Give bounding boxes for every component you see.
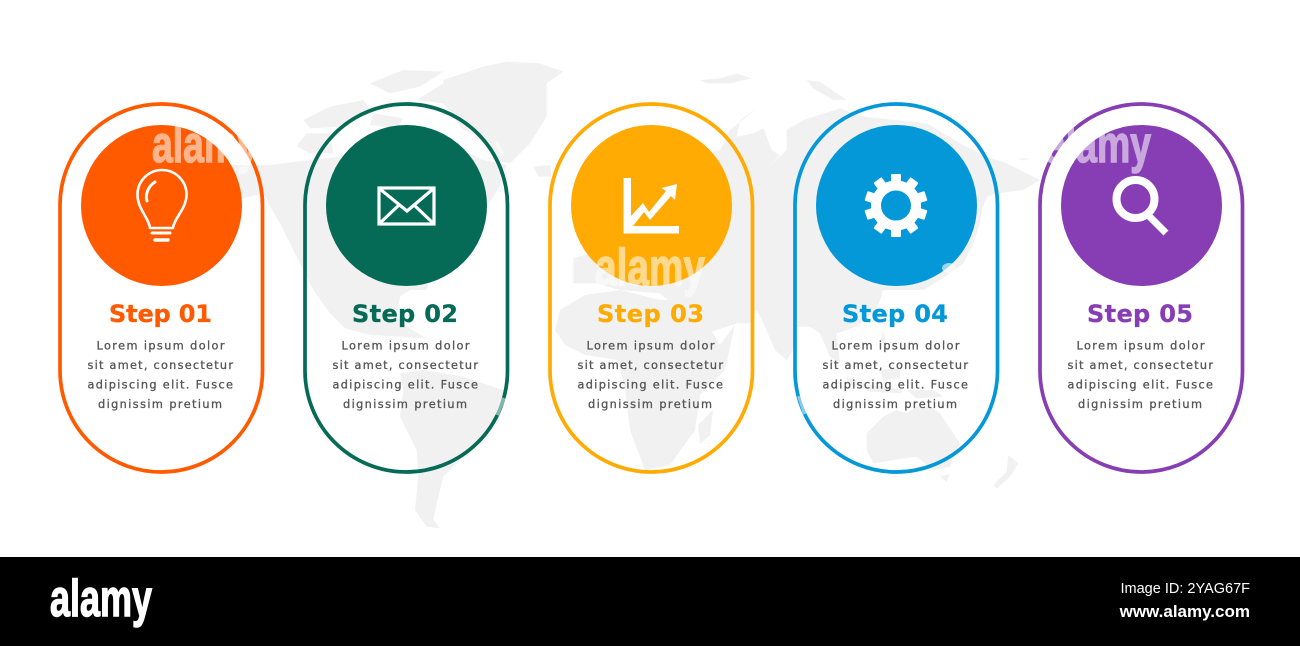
description: adipiscing elit. Fusce (332, 379, 478, 392)
map: madagascar (698, 410, 713, 444)
description: dignissim pretium (343, 398, 467, 411)
website: www.alamy.com (1119, 602, 1250, 621)
watermarks: alamy (595, 239, 705, 297)
description (332, 339, 478, 411)
map: africa (555, 290, 735, 470)
description: dignissim pretium (98, 398, 222, 411)
pill outline (60, 104, 262, 472)
description: sit amet, consectetur (88, 359, 233, 372)
map: south america (400, 370, 503, 528)
description (578, 339, 723, 411)
heading: Step 05 (1087, 300, 1193, 328)
icon circle (1061, 125, 1222, 286)
description: adipiscing elit. Fusce (88, 379, 233, 392)
description: Lorem ipsum dolor (832, 339, 960, 352)
pill outline (795, 104, 998, 472)
step 1 panel (60, 104, 262, 472)
icon circle (571, 125, 732, 286)
description: dignissim pretium (588, 398, 712, 411)
description: sit amet, consectetur (1068, 359, 1213, 372)
description: Lorem ipsum dolor (586, 339, 715, 352)
description: adipiscing elit. Fusce (1068, 379, 1213, 392)
heading: Step 01 (109, 300, 212, 328)
description: dignissim pretium (833, 398, 957, 411)
description: Lorem ipsum dolor (1076, 339, 1205, 352)
icon: magnifying glass (1116, 180, 1166, 233)
watermarks: alamy (1045, 116, 1151, 174)
step 4 panel (795, 104, 998, 472)
description: dignissim pretium (1078, 398, 1202, 411)
description (88, 339, 233, 411)
description: Lorem ipsum dolor (96, 339, 225, 352)
pill outline (1040, 104, 1242, 472)
icon circle (816, 125, 977, 286)
description (1068, 339, 1213, 411)
watermarks (152, 116, 1151, 415)
icon circle (326, 125, 487, 286)
icon circle (81, 125, 242, 286)
footer logo: alamy (50, 570, 152, 628)
step 2 panel (305, 104, 508, 472)
description: adipiscing elit. Fusce (822, 379, 968, 392)
description: sit amet, consectetur (578, 359, 723, 372)
heading: Step 04 (842, 300, 948, 328)
world map background (230, 62, 1040, 528)
heading: Step 02 (352, 300, 458, 328)
pill outline (305, 104, 508, 472)
icon: light bulb (138, 170, 186, 240)
step 3 panel (550, 104, 752, 472)
watermarks: alamy (152, 116, 258, 174)
image id: Image ID: 2YAG67F (1121, 581, 1250, 597)
map: oceania and southeast asia islands (785, 332, 1018, 488)
heading: Step 03 (597, 300, 704, 328)
icon: gear (864, 174, 928, 237)
icon: growth chart (624, 178, 679, 234)
footer bar (0, 557, 1300, 646)
description: sit amet, consectetur (332, 359, 478, 372)
description (822, 339, 968, 411)
description: sit amet, consectetur (822, 359, 968, 372)
map: north america and greenland (230, 62, 563, 338)
map: eurasia (573, 73, 1040, 363)
description: adipiscing elit. Fusce (578, 379, 723, 392)
icon: envelope (379, 188, 434, 224)
description: Lorem ipsum dolor (342, 339, 470, 352)
pill outline (550, 104, 752, 472)
step 5 panel (1040, 104, 1242, 472)
